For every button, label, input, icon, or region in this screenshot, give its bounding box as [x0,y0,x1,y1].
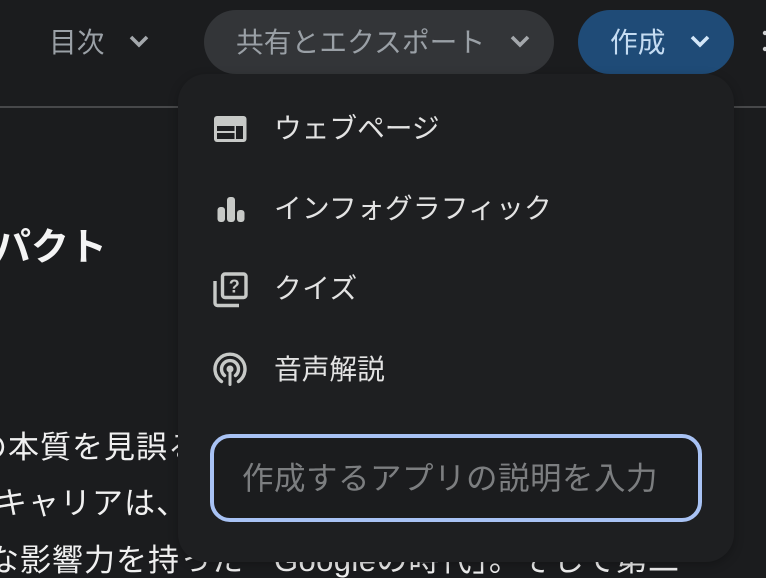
toc label: 目次 [49,27,104,58]
icon: bar chart [218,197,244,222]
article line 3: な影響力を持った「Googleの時代」。そして第二 [0,538,680,578]
infographic label: インフォグラフィック [274,193,552,224]
icon: quiz: ? [229,276,240,296]
web page label: ウェブページ [274,113,440,144]
icon: more menu dots [762,30,766,52]
create label: 作成 [610,27,665,58]
icon: create chevron [690,36,710,48]
share and export button [204,10,554,74]
menu item: quiz [213,272,358,308]
header divider [0,106,766,108]
icon: quiz [213,272,248,308]
icon: podcast signal [213,352,247,386]
background article text [0,430,680,578]
menu item: infographic [218,193,552,224]
input placeholder: 作成するアプリの説明を入力 [242,460,658,496]
menu item: web page [214,113,440,144]
quiz label: クイズ [274,273,358,304]
menu item: audio overview [213,352,385,386]
create button [578,10,734,74]
icon: share chevron [510,36,530,48]
icon: web page [214,116,246,142]
share label: 共有とエクスポート [236,27,485,58]
icon: toc chevron [130,36,148,48]
app description input [210,434,702,522]
article line 2: キャリアは、 [0,486,188,521]
panel: create dropdown menu [178,74,734,562]
audio overview label: 音声解説 [274,354,385,385]
toc button [49,27,148,58]
